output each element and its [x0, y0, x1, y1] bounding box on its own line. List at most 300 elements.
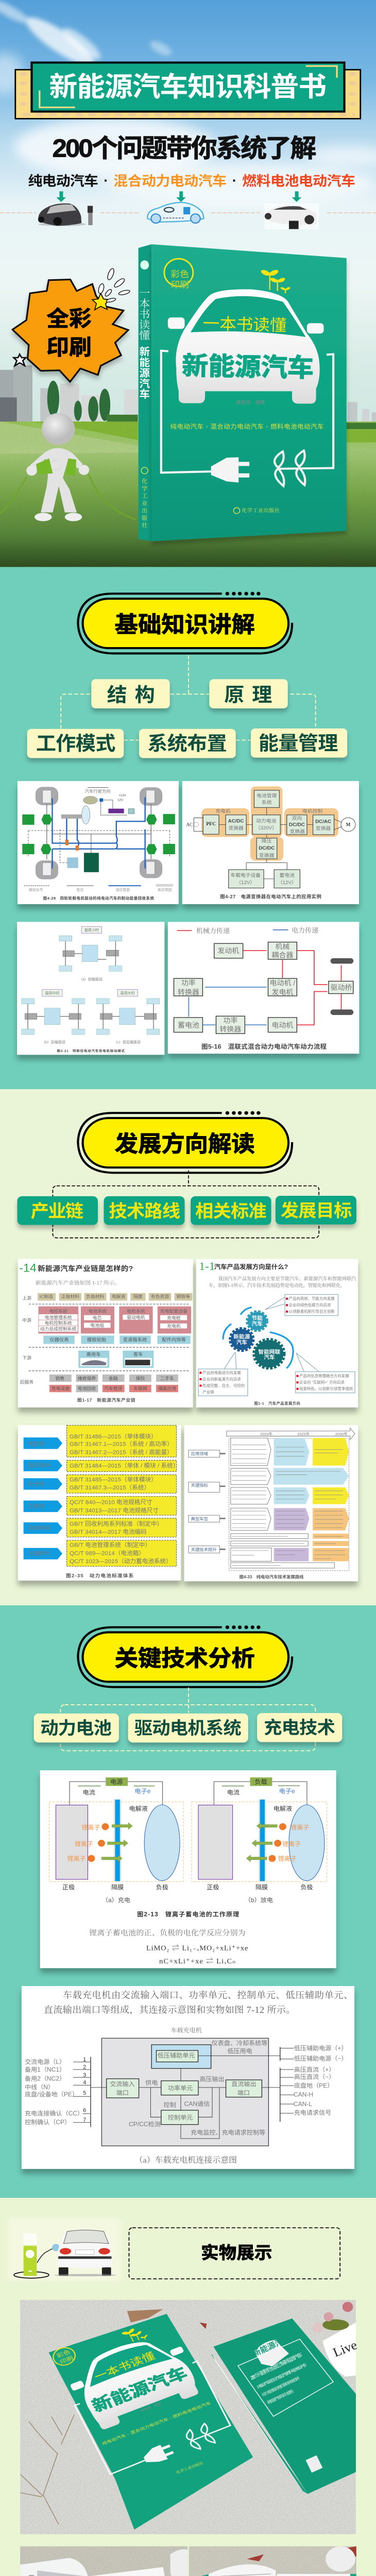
- diagram: power converter application: DC/AC: [315, 819, 331, 824]
- panel: lithium-ion battery principle: 隔膜: [255, 1884, 268, 1891]
- photo: front and back covers: 崔胜民 编著: [140, 2401, 162, 2413]
- panel: on-board charger diagram: 控制确认（CP）: [25, 2119, 71, 2126]
- panel: on-board charger diagram: 端口: [116, 2089, 129, 2096]
- panel: on-board charger diagram: 低压辅助电源（−）: [294, 2055, 348, 2062]
- diagram: series hybrid power flow: 图5-16 混联式混合动力电动汽车动力流程: [201, 1043, 327, 1050]
- diagram: series hybrid power flow: 电力传递: [292, 926, 318, 934]
- panel: battery standards page: 互换性: [28, 1503, 45, 1510]
- hero book: front cover: 崔胜民 编著: [236, 399, 265, 405]
- panel: product development direction page: 企业向新能源方向迈进: [202, 1377, 241, 1381]
- panel: industry chain page: [18, 1259, 193, 1408]
- panel: lithium-ion battery principle: 锂离子: [75, 1840, 93, 1848]
- hero book: front cover: 一本书读懂: [202, 314, 287, 334]
- panel: lithium-ion battery principle: 电解液: [129, 1805, 148, 1812]
- hero book: spine: 读: [139, 319, 150, 331]
- photo: front and back covers: 纯电动汽车·混合动力电动汽车·燃料电池电动汽车: [256, 2362, 308, 2389]
- panel: product development direction page: 1-1: [199, 1260, 215, 1273]
- diagram: power converter application: 变换器: [316, 825, 331, 832]
- hero book: spine: 源: [139, 367, 150, 379]
- topic tag: energy management: [251, 728, 347, 758]
- hero book: front cover: 新能源汽车: [182, 352, 314, 382]
- diagram: power converter application: 动力电池: [256, 818, 277, 824]
- panel: industry chain page: 下游: [22, 1355, 31, 1360]
- panel: industry chain page: 负极材料: [86, 1294, 105, 1299]
- diagram: braking energy recovery: 真空管路: [158, 888, 172, 892]
- diagram: series hybrid power flow: [168, 922, 359, 1054]
- panel: industry chain page: 钢铁等: [176, 1294, 190, 1299]
- diagram: power converter application: 系统: [262, 800, 272, 806]
- diagram: series hybrid power flow: 蓄电池: [178, 1022, 199, 1029]
- panel: product development direction page: [196, 1259, 358, 1408]
- panel: product development direction page: 汽车产品发展方向是什么?: [214, 1263, 288, 1270]
- panel: industry chain page: 配件内饰等: [162, 1337, 186, 1343]
- panel: industry chain page: 充电设施: [52, 1385, 70, 1391]
- panel: on-board charger diagram: 6: [83, 2108, 86, 2113]
- diagram: series hybrid power flow: 机械: [275, 943, 290, 951]
- panel: lithium-ion battery principle: LiMO₂ ⇌ Li₁₋ₓMO₂+xLi⁺+xe: [146, 1944, 248, 1953]
- panel: industry chain page: 二手车: [160, 1376, 174, 1381]
- diagram: braking energy recovery: 汽车行驶方向: [84, 789, 111, 793]
- heading: basic knowledge: [78, 592, 292, 653]
- panel: battery standards page: 关键附件: [28, 1550, 50, 1557]
- photo: front and back covers: 新能源汽车: [89, 2364, 190, 2415]
- section background: product photos: [0, 2198, 376, 2576]
- panel: industry chain page: 销售: [56, 1376, 64, 1381]
- diagram: power converter application: M: [346, 822, 351, 827]
- diagram: power converter application: DC/DC: [259, 845, 275, 851]
- panel: lithium-ion battery principle: 锂离子: [278, 1855, 297, 1862]
- diagram: power converter application: DC/DC: [289, 822, 305, 828]
- panel: battery standards page: QC/T 840—2010 电池规格尺寸: [70, 1499, 152, 1506]
- panel: battery standards page: QC/T 989—2014（电池箱）: [70, 1550, 145, 1556]
- panel: on-board charger diagram: 高压直流（+）: [294, 2066, 335, 2073]
- diagram: dual motor drive modes: 载荷中时: [45, 991, 60, 995]
- hero book: spine: 学: [142, 485, 147, 492]
- topic tag: related standards: 相关标准: [195, 1202, 267, 1221]
- tagline: three vehicle types: 混合动力电动汽车: [113, 173, 227, 189]
- dashed orange rule: [0, 212, 376, 213]
- panel: lithium-ion battery principle: 电子e: [135, 1788, 151, 1794]
- topic tag: principle: [209, 679, 288, 708]
- photo: front and back covers: 一本书读懂: [93, 2350, 157, 2383]
- panel: on-board charger diagram: 车载充电机: [171, 2027, 202, 2034]
- photo: front and back covers: 新能源汽车购买与使用: [266, 2388, 295, 2405]
- photo: front and back covers: 彩色: [56, 2348, 72, 2359]
- subtitle: 200个问题带你系统了解: [52, 134, 317, 162]
- panel: product development direction page: 汽车: [251, 1320, 263, 1327]
- panel: on-board charger diagram: 直流输出端口等组成，其连接示意图和实物如图 7-12 所示。: [44, 2005, 296, 2015]
- hero book: spine: 车: [139, 388, 150, 400]
- diagram: braking energy recovery: 模拟信号: [29, 888, 43, 892]
- topic tag: drive motor system: [128, 1714, 248, 1742]
- diagram: series hybrid power flow: 发动机: [217, 947, 239, 955]
- diagram: braking energy recovery: 图4-28 四轮轮毂电机驱动的纯电动汽车的制动能量回收系统: [43, 896, 155, 901]
- topic tag: charging technology: [257, 1713, 342, 1742]
- panel: lithium-ion battery principle: 锂离子: [67, 1855, 86, 1862]
- panel: on-board charger diagram: 4: [83, 2080, 86, 2086]
- panel: industry chain page: 客车: [133, 1351, 143, 1357]
- panel: on-board charger diagram: 控制: [164, 2102, 176, 2108]
- hero book: spine: 一: [139, 287, 150, 299]
- diagram: power converter application: 车载电子设备: [230, 872, 261, 878]
- diagram: power converter application: 电机控制: [302, 808, 322, 815]
- title banner: [15, 62, 361, 118]
- panel: on-board charger diagram: 低压用电: [227, 2047, 252, 2055]
- diagram: braking energy recovery: [18, 781, 179, 904]
- panel: EV technology roadmap page: 2030年: [335, 1432, 348, 1436]
- panel: industry chain page: 驱动电机: [127, 1314, 145, 1320]
- panel: industry chain page: 储能应用: [158, 1385, 176, 1391]
- panel: on-board charger diagram: 3: [83, 2072, 86, 2078]
- panel: industry chain page: 图1-17 新能源汽车产业链: [77, 1397, 135, 1402]
- panel: industry chain page: 有色资源: [151, 1294, 169, 1299]
- panel: on-board charger diagram: 底盘地（PE）: [294, 2082, 333, 2089]
- heading box: product photos: 实物展示: [201, 2244, 272, 2263]
- hero book: spine: 出: [142, 507, 147, 514]
- topic tag: system layout: 系统布置: [147, 733, 227, 755]
- diagram: power converter application: PFC: [206, 821, 216, 827]
- diagram: series hybrid power flow: 驱动桥: [331, 984, 352, 991]
- panel: on-board charger diagram: 5: [83, 2090, 86, 2096]
- diagram: power converter application: AC/DC: [228, 819, 244, 824]
- arrows to vehicles: [56, 191, 301, 202]
- panel: lithium-ion battery principle: 电源: [110, 1778, 123, 1785]
- hero book: spine: 版: [142, 514, 147, 521]
- diagram: series hybrid power flow: 发电机: [271, 989, 294, 996]
- topic tag: development goals: 发展目标: [281, 1201, 352, 1221]
- diagram: power converter application: [182, 781, 359, 904]
- panel: on-board charger diagram: CAN通信: [184, 2100, 210, 2107]
- panel: product development direction page: 节能: [251, 1315, 263, 1321]
- topic tag: industry chain: 产业链: [31, 1202, 83, 1221]
- panel: lithium-ion battery principle: [40, 1770, 336, 1968]
- hero book: spine: 化: [142, 478, 147, 484]
- panel: industry chain page: 电解液: [112, 1294, 126, 1299]
- topic tag: drive motor system: 驱动电机系统: [134, 1719, 242, 1738]
- hero book: spine: 能: [139, 357, 150, 368]
- panel: industry chain page: 新能源汽车产业链是怎样的?: [38, 1264, 133, 1273]
- panel: on-board charger diagram: 7: [83, 2117, 86, 2123]
- panel: on-board charger diagram: 高压直流（−）: [294, 2073, 335, 2080]
- panel: industry chain page: 充电机: [167, 1323, 181, 1329]
- burst badge: full colour printing: [12, 268, 130, 382]
- panel: lithium-ion battery principle: 电子e: [279, 1788, 295, 1794]
- topic tag: principle: 原理: [224, 684, 272, 706]
- section background: hero sky: [0, 0, 376, 567]
- topic tag: industry chain: [18, 1196, 98, 1225]
- topic tag: working modes: [27, 729, 124, 758]
- sky clouds: [0, 0, 376, 205]
- section background: development direction: [0, 1089, 376, 1605]
- panel: lithium-ion battery principle: 锂离子: [81, 1824, 100, 1831]
- panel: industry chain page: 电控系统: [49, 1308, 67, 1314]
- panel: industry chain page: 充电配套设备: [160, 1308, 187, 1314]
- diagram: series hybrid power flow: 功率: [181, 979, 196, 987]
- diagram: series hybrid power flow: 转换器: [219, 1025, 242, 1033]
- panel: battery standards page: GB/T 34013—2017 电池规格尺寸: [70, 1507, 159, 1514]
- hero book: spine: 业: [142, 500, 147, 506]
- topic tag: technology roadmap: 技术路线: [109, 1202, 180, 1221]
- panel: battery standards page: GB/T 34014—2017 电池编码: [70, 1528, 147, 1535]
- panel: lithium-ion battery principle: 电流: [227, 1789, 240, 1796]
- diagram: series hybrid power flow: 转换器: [178, 988, 199, 996]
- title banner: 新能源汽车知识科普书: [49, 72, 327, 102]
- panel: industry chain page: 保险: [136, 1376, 145, 1381]
- panel: lithium-ion battery principle: 负载: [254, 1778, 267, 1785]
- photo: open book, new energy chapter: [20, 2546, 187, 2576]
- diagram: dual motor drive modes: （c）前后轴驱动: [114, 1040, 141, 1044]
- heading: key technology: 关键技术分析: [115, 1647, 255, 1671]
- tagline: three vehicle types: [28, 173, 355, 189]
- diagram: braking energy recovery: 12V: [117, 799, 123, 802]
- panel: EV technology roadmap page: 关键技术提升: [191, 1547, 217, 1552]
- burst badge: full colour printing: 全彩: [46, 307, 92, 331]
- burst badge: full colour printing: 印刷: [46, 335, 92, 360]
- panel: on-board charger diagram: 充电请求信号: [294, 2109, 331, 2116]
- topic tag: power battery: 动力电池: [40, 1719, 112, 1738]
- panel: battery standards page: GB/T 31484—2015（单体 / 模块 / 系统）: [70, 1462, 179, 1469]
- diagram: power converter application: （320V）: [255, 825, 277, 831]
- topic tag: related standards: [191, 1196, 271, 1225]
- panel: battery standards page: 电性能: [28, 1440, 45, 1447]
- dashed connector: development direction: [53, 1171, 319, 1238]
- diagram: series hybrid power flow: 电动机 /: [270, 979, 295, 987]
- panel: product development direction page: 产业链: [202, 1390, 214, 1394]
- panel: product development direction page: 产品向高效、节能方向发展: [289, 1296, 335, 1301]
- diagram: series hybrid power flow: 机械力传递: [196, 927, 230, 935]
- panel: on-board charger diagram: 低压辅助单元: [158, 2052, 195, 2059]
- panel: EV technology roadmap page: 2020年: [260, 1432, 272, 1436]
- panel: battery standards page: 图2-35 动力电池标准体系: [66, 1573, 134, 1579]
- panel: industry chain page: 汽车租赁: [104, 1385, 123, 1391]
- panel: battery standards page: GB/T 电池管理系统（制定中）: [70, 1541, 151, 1549]
- hero book: front cover: 化学工业出版社: [242, 507, 280, 514]
- diagram: dual motor drive modes: （a）前轴驱动: [79, 977, 102, 981]
- panel: EV technology roadmap page: 2025年: [297, 1432, 310, 1436]
- panel: battery standards page: GB/T 31486—2015（单体模块）: [70, 1433, 157, 1440]
- panel: on-board charger diagram: CAN-H: [294, 2091, 313, 2098]
- panel: on-board charger diagram: 供电: [145, 2079, 158, 2086]
- diagram: power converter application: 蓄电池: [280, 872, 295, 878]
- panel: product development direction page: 企业向 “互联网+” 方向迈进: [299, 1380, 345, 1384]
- hero book: spine: [139, 244, 151, 541]
- panel: industry chain page: 橡胶轮胎: [87, 1337, 106, 1343]
- hero book: spine: 书: [139, 308, 150, 320]
- panel: product development direction page: 智能网联: [258, 1349, 281, 1355]
- tagline: three vehicle types: 燃料电池电动汽车: [242, 173, 355, 189]
- panel: lithium-ion battery principle: 正极: [207, 1884, 219, 1891]
- panel: industry chain page: 金融: [109, 1376, 118, 1381]
- panel: EV technology roadmap page: [184, 1425, 358, 1581]
- panel: industry chain page: 电机控制系统: [45, 1320, 72, 1326]
- panel: industry chain page: IC制造: [40, 1294, 53, 1299]
- diagram: power converter application: 变换器: [228, 825, 244, 832]
- diagram: power converter application: AC: [186, 822, 193, 827]
- diagram: power converter application: 充电机: [215, 808, 231, 815]
- hero book: front cover: [151, 244, 347, 541]
- panel: industry chain page: 正极材料: [61, 1294, 79, 1299]
- panel: on-board charger diagram: 备用1（NC1）: [25, 2066, 65, 2073]
- diagram: power converter application: 降压: [262, 838, 272, 844]
- panel: industry chain page: 电池管理系统: [45, 1314, 72, 1320]
- panel: product development direction page: 新能源: [233, 1333, 250, 1340]
- panel: industry chain page: 变速箱系统: [123, 1337, 147, 1343]
- topic tag: structure: [91, 679, 170, 708]
- panel: industry chain page: 新能源汽车产业链如图 1-17 所示。: [36, 1280, 120, 1286]
- heading: key technology: [78, 1625, 292, 1687]
- hero book: spine: 本: [139, 298, 150, 310]
- panel: product development direction page: 培育特色，以创新引领竞争规则: [299, 1386, 353, 1391]
- panel: industry chain page: 车联网: [133, 1385, 147, 1391]
- panel: industry chain page: 上游: [22, 1295, 31, 1300]
- hero book: spine: 社: [142, 521, 147, 529]
- diagram: dual motor drive modes: 载荷大时: [121, 991, 135, 995]
- diagram: series hybrid power flow: 耦合器: [271, 952, 294, 959]
- panel: battery standards page: 回收利用: [28, 1525, 50, 1532]
- panel: lithium-ion battery principle: 隔膜: [111, 1884, 124, 1891]
- photo: front and back covers: 纯电动汽车 ◦ 混合动力电动汽车 ◦ 燃料电池电动汽车: [101, 2400, 212, 2446]
- photo: front and back covers: 化学工业出版社: [175, 2460, 204, 2475]
- panel: on-board charger diagram: [22, 1986, 354, 2169]
- hero book: front cover: 印刷: [170, 280, 189, 290]
- topic tag: charging technology: 充电技术: [264, 1719, 335, 1738]
- diagram: power converter application: 电池管理: [257, 793, 277, 799]
- panel: product development direction page: 形成完整、自主、可控的: [202, 1383, 245, 1388]
- panel: industry chain page: 动力总成控制系统: [40, 1326, 77, 1332]
- panel: on-board charger diagram: 低压辅助电源（+）: [294, 2045, 348, 2052]
- diagram: dual motor drive modes: 图4-21 特斯拉电动汽车双电机驱动模式: [57, 1048, 125, 1053]
- panel: industry chain page: 维修保养: [78, 1376, 96, 1381]
- hero book: spine: 汽: [139, 378, 150, 389]
- topic tag: energy management: 能量管理: [259, 733, 338, 754]
- panel: product development direction page: 以领跑者机制引导自主创新: [289, 1309, 335, 1314]
- mascot holding plugs: [0, 413, 135, 521]
- topic tag: power battery: [34, 1714, 119, 1742]
- panel: on-board charger diagram: 交流电源（L）: [25, 2058, 65, 2065]
- panel: industry chain page: 后服务: [20, 1379, 34, 1385]
- panel: battery standards page: GB/T 31467.3—2015（系统）: [70, 1484, 150, 1491]
- heading: development direction: 发展方向解读: [115, 1132, 255, 1157]
- panel: on-board charger diagram: 充电连接确认（CC）: [25, 2110, 83, 2117]
- panel: industry chain page: 电芯: [93, 1315, 102, 1320]
- diagram: power converter application: 双向: [292, 815, 302, 821]
- heading: basic knowledge: 基础知识讲解: [115, 613, 255, 637]
- panel: industry chain page: -14: [19, 1261, 37, 1274]
- diagram: dual motor drive modes: （b）后轴驱动: [42, 1040, 65, 1044]
- hero book: front cover: 纯电动汽车 ◦ 混合动力电动汽车 ◦ 燃料电池电动汽车: [170, 422, 324, 430]
- panel: industry chain page: 电机系统: [127, 1308, 145, 1314]
- panel: battery standards page: GB/T 31467.1—2015（系统 / 高功率）: [70, 1440, 173, 1448]
- panel: lithium-ion battery principle: （a）充电: [102, 1896, 130, 1904]
- photo: front and back covers: 动力电池·驱动电机系统·充电技术: [261, 2376, 301, 2398]
- diagram: series hybrid power flow: 功率: [223, 1016, 237, 1025]
- photo: front and back covers: [20, 2300, 359, 2534]
- panel: on-board charger diagram: CP/CC检测: [129, 2121, 161, 2128]
- panel: on-board charger diagram: 仪表盘、冷却系统等: [212, 2040, 268, 2047]
- panel: industry chain page: 乘用车: [87, 1351, 101, 1357]
- panel: battery standards page: GB/T 回收利用系列标准（制定中）: [70, 1520, 163, 1528]
- panel: product development direction page: 产品向电驱动方向发展: [202, 1370, 241, 1375]
- diagram: power converter application: 图4-27 电源变换器在电动汽车上的应用实例: [220, 893, 321, 899]
- panel: on-board charger diagram: 交流输入: [110, 2080, 135, 2088]
- panel: EV technology roadmap page: 应用领域: [191, 1451, 208, 1456]
- panel: industry chain page: 仪器仪表: [49, 1337, 69, 1343]
- panel: lithium-ion battery principle: 锂离子: [290, 1824, 310, 1831]
- panel: industry chain page: 充电桩: [167, 1315, 181, 1320]
- panel: on-board charger diagram: 充电监控、充电请求控制等: [191, 2129, 265, 2136]
- panel: on-board charger diagram: 直流输出: [231, 2080, 257, 2088]
- panel: lithium-ion battery principle: 锂离子: [282, 1840, 301, 1848]
- diagram: braking energy recovery: 液压管路: [115, 888, 130, 892]
- panel: product development direction page: 汽车: [264, 1354, 275, 1361]
- hybrid car outline: [147, 202, 204, 223]
- photo: front and back covers: Live: [331, 2337, 359, 2360]
- panel: industry chain page: 电池回收: [78, 1385, 96, 1391]
- cityscape and meadow: [0, 365, 376, 567]
- panel: on-board charger diagram: 中线（N）: [25, 2083, 54, 2091]
- panel: product development direction page: 图1-1 汽车产品发展方向: [254, 1401, 300, 1405]
- panel: on-board charger diagram: CAN-L: [294, 2100, 313, 2108]
- panel: lithium-ion battery principle: 负极: [300, 1884, 313, 1891]
- panel: battery standards page: GB/T 31485—2015（单体模块）: [70, 1476, 157, 1483]
- panel: on-board charger diagram: （a）车载充电机连接示意图: [135, 2156, 237, 2164]
- panel: lithium-ion battery principle: nC+xLi⁺+xe ⇌ LiₓCₙ: [159, 1957, 235, 1965]
- topic tag: technology roadmap: [104, 1196, 184, 1225]
- topic tag: working modes: 工作模式: [36, 733, 115, 755]
- panel: battery standards page: QC/T 1023—2015（动力蓄电池系统）: [70, 1558, 172, 1565]
- panel: on-board charger diagram: 端口: [237, 2089, 250, 2096]
- photo: open book, batteries chapter: [189, 2546, 356, 2576]
- panel: EV technology roadmap page: 关键指标: [191, 1483, 208, 1488]
- section background: key technology: [0, 1605, 376, 2198]
- panel: lithium-ion battery principle: 图2-13 锂离子蓄电池的工作原理: [137, 1911, 239, 1918]
- panel: lithium-ion battery principle: 负极: [156, 1884, 168, 1891]
- diagram: dual motor drive modes: 载荷小时: [84, 928, 99, 933]
- panel: product development direction page: 我国汽车产品发展方向主要是节能汽车、新能源汽车和智能网联汽: [218, 1276, 356, 1281]
- panel: industry chain page: 电池组: [90, 1323, 104, 1328]
- pure electric car: [38, 204, 93, 226]
- diagram: power converter application: （12V）: [278, 879, 297, 886]
- panel: industry chain page: 隔膜: [133, 1294, 143, 1299]
- topic tag: development goals: [276, 1196, 356, 1225]
- panel: product development direction page: 企业向绿色低碳方向迈进: [289, 1303, 331, 1308]
- fuel cell car: [265, 204, 319, 230]
- panel: on-board charger diagram: 功率单元: [168, 2084, 193, 2092]
- panel: EV technology roadmap page: 典型车型: [191, 1516, 208, 1521]
- topic tag: structure: 结构: [107, 684, 155, 706]
- topic tag: system layout: [139, 729, 236, 758]
- panel: product development direction page: 汽车: [236, 1339, 247, 1346]
- diagram: series hybrid power flow: 电动机: [271, 1022, 294, 1029]
- diagram: dual motor drive modes: [17, 922, 164, 1055]
- heading: development direction: [78, 1111, 292, 1173]
- diagram: power converter application: 变换器: [290, 828, 305, 835]
- photo: front and back covers: 印刷: [59, 2354, 75, 2365]
- panel: on-board charger diagram: 车载充电机由交流输入端口、功率单元、控制单元、低压辅助单元、: [63, 1990, 353, 2000]
- panel: on-board charger diagram: 备用2（NC2）: [25, 2075, 65, 2082]
- tagline: three vehicle types: ·: [232, 173, 237, 188]
- panel: on-board charger diagram: 高压输出: [199, 2076, 225, 2082]
- panel: on-board charger diagram: 2: [83, 2064, 86, 2071]
- hero book: spine: 懂: [139, 329, 150, 342]
- heading box: product photos: [8, 2218, 340, 2281]
- tagline: three vehicle types: 纯电动汽车: [28, 173, 98, 189]
- panel: lithium-ion battery principle: （b）放电: [245, 1896, 273, 1904]
- panel: lithium-ion battery principle: 正极: [62, 1884, 75, 1891]
- panel: battery standards page: GB/T 31467.2—2015（系统 / 高能量）: [70, 1449, 173, 1455]
- panel: lithium-ion battery principle: 电流: [83, 1789, 95, 1796]
- panel: battery standards page: [18, 1425, 181, 1581]
